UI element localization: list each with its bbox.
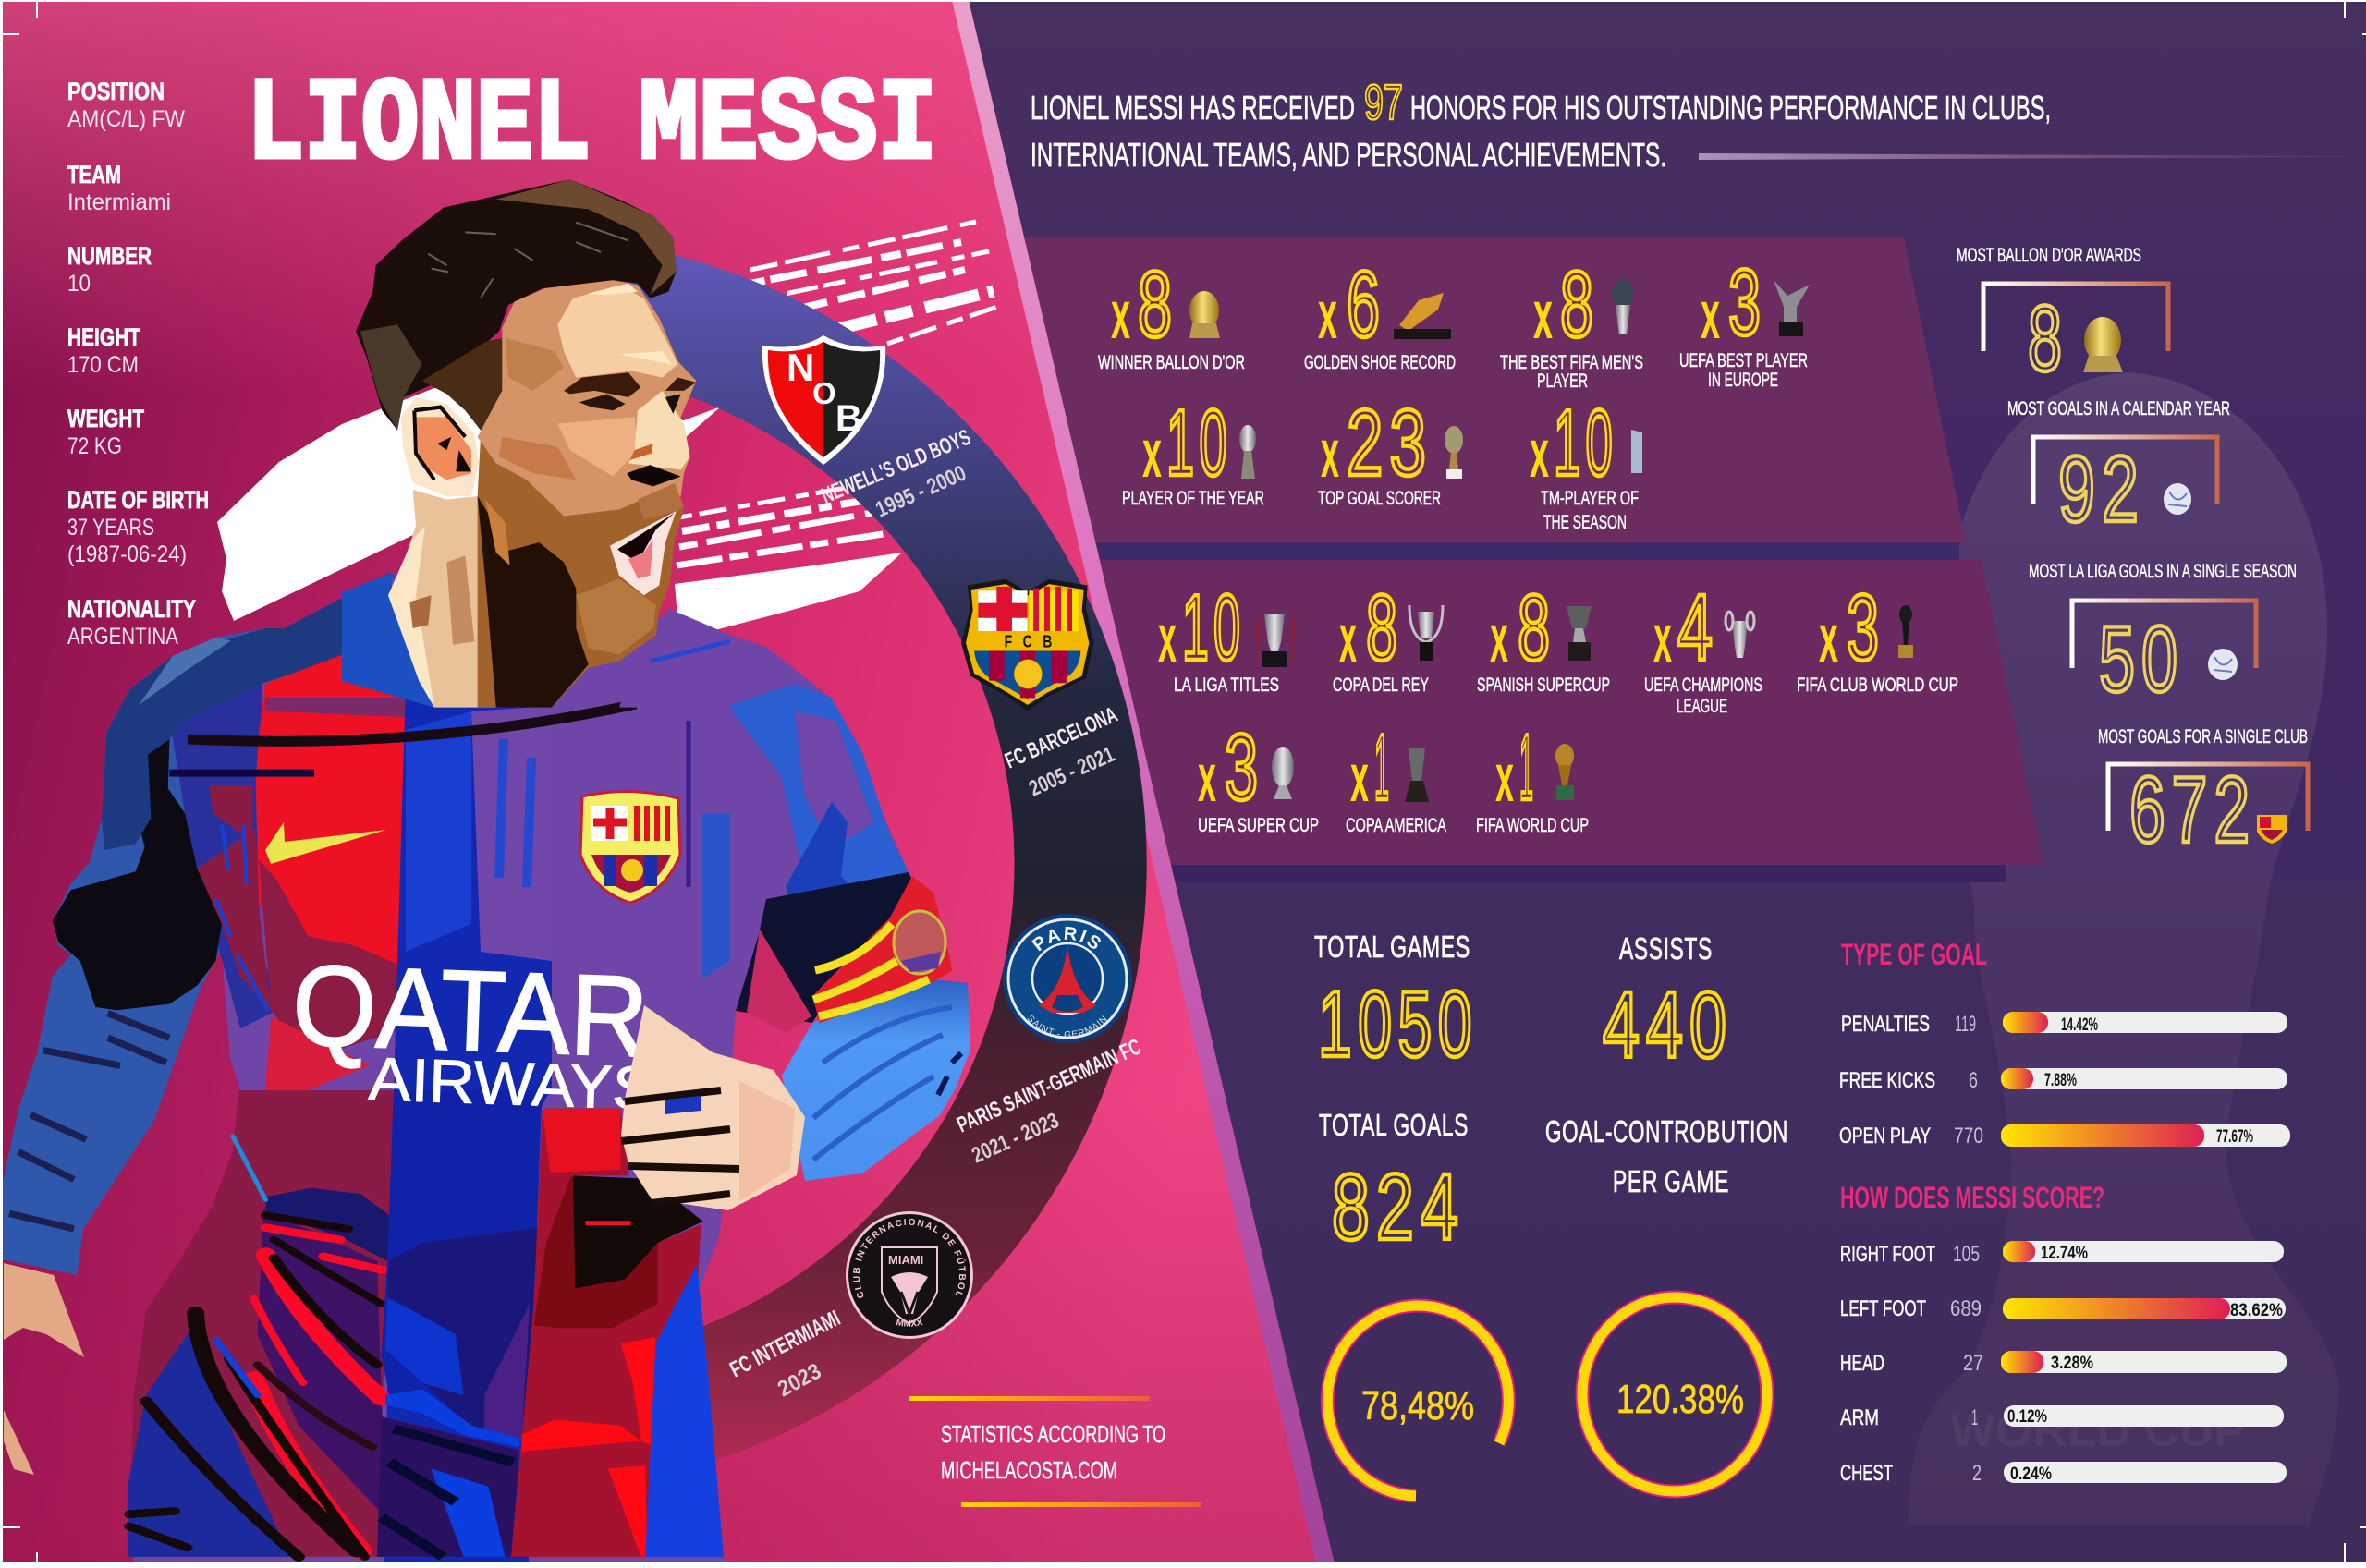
honour: TM-Player of the Season: [1530, 392, 1642, 533]
shirt left red panel: [256, 638, 413, 967]
chart: type of goal: [1839, 938, 2290, 1149]
bar: free kicks: FREE KICKS: [1839, 1068, 1935, 1093]
honour: Copa America: x: [1350, 739, 1369, 816]
record: Ballon d'Or awards: 8: [2028, 287, 2062, 391]
honour: Champions League: [1644, 577, 1762, 717]
player profile list: 37 YEARS: [67, 515, 154, 541]
honour: Copa del Rey: COPA DEL REY: [1333, 675, 1429, 696]
icon: ball: [2164, 483, 2191, 515]
stat heading: goal contribution: GOAL-CONTROBUTION: [1545, 1114, 1788, 1149]
intro sentence: 97: [1364, 75, 1403, 130]
club text: Inter Miami: [726, 1306, 845, 1402]
badge: Inter Miami: CLUB INTERNACIONAL DE FÚTBOL: [853, 1218, 966, 1298]
torso base: [130, 573, 909, 1562]
bar: penalties: 14.42%: [2061, 1015, 2098, 1035]
head and neck: [342, 179, 730, 708]
arm gap: [747, 930, 811, 1033]
honour: UEFA Best Player: UEFA BEST PLAYER: [1679, 350, 1808, 371]
intro sentence: LIONEL MESSI HAS RECEIVED: [1031, 89, 1355, 127]
bracket: [2108, 764, 2308, 831]
badge: Newell's Old Boys: B: [835, 398, 862, 439]
honour: UEFA Best Player: 3: [1728, 251, 1761, 355]
bar: open play: [1839, 1124, 2290, 1149]
honour: Copa America: [1346, 716, 1446, 836]
bar: left foot: [1840, 1296, 2286, 1321]
collar: [342, 572, 730, 708]
bar: penalties: 119: [1955, 1012, 1976, 1037]
icon: ball: [2208, 649, 2238, 680]
bar: right foot: 12.74%: [2041, 1244, 2088, 1263]
icon: UEFA trophy: [1774, 280, 1810, 336]
icon: trophy: [1239, 425, 1256, 479]
club text: PSG: [953, 1034, 1145, 1168]
badge: Newell's Old Boys: O: [812, 376, 836, 410]
honour: La Liga: 10: [1182, 577, 1245, 680]
intro sentence: [1031, 75, 2346, 174]
mouth: [610, 511, 677, 595]
source note: MICHELACOSTA.COM: [941, 1456, 1117, 1484]
badge: FC Barcelona: FCB: [1005, 631, 1052, 651]
honour: UEFA Best Player: IN EUROPE: [1708, 370, 1778, 391]
honour: The Best FIFA: PLAYER: [1537, 371, 1588, 392]
shirt center blue stripe: [384, 682, 552, 1562]
stat: assists: 440: [1603, 974, 1733, 1077]
hair: [356, 179, 677, 431]
club text: PSG: 2021 - 2023: [968, 1108, 1063, 1168]
intro sentence: HONORS FOR HIS OUTSTANDING PERFORMANCE IN CLUBS,: [1410, 89, 2051, 127]
icon: Champions League trophy: [1726, 612, 1754, 658]
honour: UEFA Super Cup: 3: [1225, 716, 1258, 820]
honour: UEFA Super Cup: [1198, 716, 1319, 836]
bar: head: 3.28%: [2051, 1354, 2093, 1373]
far sleeve: [0, 628, 388, 1275]
honour: Champions League: x: [1653, 600, 1672, 676]
panel: individual honours: [1024, 237, 1966, 542]
panel: club honours: [1091, 560, 2043, 865]
shirt left lower: [128, 1090, 394, 1557]
honour: UEFA Best Player: x: [1701, 276, 1720, 353]
shirt sponsor: nike swoosh: [265, 822, 386, 864]
player profile list: [67, 78, 209, 650]
honour: Spanish Supercup: x: [1490, 600, 1508, 676]
upper arm: [736, 872, 950, 1023]
club text: Inter Miami: FC INTERMIAMI: [726, 1306, 845, 1382]
honour: Ballon d'Or: x: [1111, 276, 1130, 353]
icon: trophy: [1445, 426, 1463, 479]
eyes and brows: [564, 372, 696, 414]
record: Ballon d'Or awards: MOST BALLON D'OR AWARDS: [1957, 245, 2141, 266]
player profile list: Intermiami: [67, 189, 171, 215]
white brush stroke: [217, 222, 1003, 639]
badge: Paris Saint-Germain: PARIS: [1031, 926, 1101, 952]
honour: FIFA World Cup: 1: [1519, 716, 1533, 820]
honour: Ballon d'Or: WINNER BALLON D'OR: [1098, 352, 1245, 373]
bracket: [2033, 437, 2217, 504]
chest seam: [188, 704, 636, 741]
honour: Copa del Rey: [1333, 577, 1443, 696]
honour: Copa America: COPA AMERICA: [1346, 815, 1446, 836]
honour: Player of the Year: 10: [1166, 392, 1232, 495]
badge: Inter Miami: [846, 1211, 973, 1339]
bar: arm: 1: [1971, 1405, 1978, 1430]
badge: Paris Saint-Germain: [1003, 914, 1132, 1043]
honour: Top Goal Scorer: [1318, 392, 1463, 509]
stat heading: goal contribution: PER GAME: [1613, 1164, 1729, 1198]
icon: Copa America trophy: [1405, 748, 1429, 802]
honour: Top Goal Scorer: TOP GOAL SCORER: [1318, 488, 1441, 509]
icon: Club World Cup trophy: [1898, 605, 1913, 658]
shirt lower right: [511, 1109, 724, 1557]
bar: penalties: [1841, 1012, 2287, 1037]
honour: The Best FIFA: THE BEST FIFA MEN'S: [1500, 352, 1643, 373]
bar: head: HEAD: [1840, 1351, 1884, 1376]
icon: Super Cup trophy: [1272, 747, 1294, 799]
honour: Golden Shoe: GOLDEN SHOE RECORD: [1304, 352, 1456, 373]
honour: FIFA World Cup: [1476, 716, 1589, 836]
chart: type of goal: TYPE OF GOAL: [1841, 938, 1987, 971]
bar: open play: 77.67%: [2216, 1127, 2253, 1147]
club text: Newell's Old Boys: NEWELL'S OLD BOYS: [818, 425, 974, 509]
stat: assists: ASSISTS: [1619, 931, 1713, 966]
honour: FIFA World Cup: FIFA WORLD CUP: [1476, 815, 1589, 836]
player profile list: AM(C/L) FW: [67, 106, 185, 132]
bar: right foot: 105: [1953, 1242, 1980, 1267]
ear: [400, 397, 479, 496]
source note: [909, 1396, 1201, 1507]
badge: Paris Saint-Germain: SAINT - GERMAIN: [1028, 1015, 1107, 1038]
honour: Spanish Supercup: 8: [1518, 577, 1550, 680]
player profile list: (1987-06-24): [67, 541, 187, 567]
icon: trophy: [1631, 430, 1642, 473]
record: goals in calendar year: 92: [2058, 438, 2145, 541]
honour: The Best FIFA: 8: [1560, 253, 1593, 357]
honour: La Liga: x: [1158, 600, 1177, 676]
bar: arm: [1840, 1405, 2284, 1430]
honour: La Liga: [1158, 577, 1294, 696]
bar: penalties: PENALTIES: [1841, 1012, 1930, 1037]
gauge: 78.48 percent: [1327, 1306, 1508, 1496]
player profile list: WEIGHT: [67, 405, 144, 432]
honour: Golden Shoe: [1304, 253, 1456, 373]
badge: Newell's Old Boys: N: [787, 346, 814, 389]
shirt right chest highlights: [689, 684, 909, 979]
badge: Inter Miami: MMXX: [896, 1319, 923, 1327]
icon: World Cup trophy: [1555, 744, 1574, 800]
club career arc: [611, 247, 1147, 1479]
player profile list: DATE OF BIRTH: [67, 486, 209, 514]
bar: free kicks: [1839, 1068, 2287, 1093]
honour: Player of the Year: x: [1142, 415, 1162, 492]
honour: TM-Player of the Season: x: [1530, 415, 1549, 492]
bar: head: [1840, 1351, 2287, 1376]
icon: The Best trophy: [1612, 279, 1634, 334]
badge: Newell's Old Boys: [762, 335, 885, 465]
record: La Liga season: 50: [2099, 608, 2184, 711]
background world cup trophy silhouette: [1908, 372, 2338, 1525]
honour: Copa del Rey: x: [1339, 600, 1357, 676]
chest upper left: [102, 573, 413, 1090]
near hand left: [4, 1263, 84, 1475]
honour: Top Goal Scorer: 23: [1347, 392, 1433, 495]
player profile list: NATIONALITY: [67, 595, 196, 623]
player profile list: ARGENTINA: [67, 624, 178, 650]
player profile list: 170 CM: [67, 352, 139, 378]
bar: arm: ARM: [1840, 1405, 1879, 1430]
honour: Champions League: 4: [1677, 577, 1713, 680]
title: [247, 60, 937, 192]
icon: Supercup trophy: [1567, 606, 1592, 661]
icon: Copa del Rey trophy: [1409, 605, 1443, 661]
beard: [478, 437, 684, 708]
icon: golden ball: [2083, 317, 2123, 372]
club text: Newell's Old Boys: [818, 425, 974, 522]
panel: left pink background: [0, 0, 1340, 1568]
record: La Liga season: [2029, 561, 2297, 711]
honour: Ballon d'Or: 8: [1138, 253, 1172, 357]
club text: FC Barcelona: [1001, 702, 1121, 801]
bracket: [2072, 601, 2256, 668]
honour: UEFA Best Player: [1679, 251, 1810, 391]
stat: total games: 1050: [1318, 973, 1478, 1076]
panel: right purple background: [969, 0, 2366, 1568]
record: goals in calendar year: [2007, 398, 2230, 541]
nose: [627, 391, 690, 486]
bar: right foot: RIGHT FOOT: [1840, 1242, 1935, 1267]
stat: total games: [1314, 930, 1478, 1076]
sideburn: [422, 334, 520, 431]
player profile list: POSITION: [67, 78, 165, 105]
neck: [388, 490, 502, 708]
bar: free kicks: 6: [1969, 1068, 1978, 1093]
stat: total goals: 824: [1332, 1156, 1465, 1259]
bar: right foot: [1840, 1241, 2284, 1267]
icon: Barcelona crest: [2257, 815, 2287, 844]
gauge: 120.38 percent: [1582, 1297, 1767, 1491]
bar: free kicks: 7.88%: [2044, 1071, 2077, 1090]
bar: chest: 2: [1972, 1461, 1982, 1486]
honour: Golden Shoe: x: [1318, 276, 1337, 353]
background world cup trophy silhouette: WORLD CUP: [1950, 1404, 2246, 1456]
player profile list: NUMBER: [67, 242, 152, 270]
bar: arm: 0.12%: [2007, 1407, 2047, 1427]
bar: left foot: 689: [1950, 1296, 1982, 1321]
bar: open play: 770: [1954, 1124, 1983, 1149]
honour: Champions League: LEAGUE: [1677, 696, 1727, 717]
player profile list: 10: [67, 271, 91, 297]
face: [478, 280, 696, 517]
club text: Newell's Old Boys: 1995 - 2000: [872, 461, 970, 522]
honour: Club World Cup: x: [1819, 600, 1838, 676]
gauge: 120.38 percent: 120.38%: [1616, 1377, 1744, 1422]
record: Ballon d'Or awards: [1957, 245, 2168, 391]
stat: total goals: TOTAL GOALS: [1319, 1108, 1469, 1142]
title: MESSI: [639, 60, 937, 192]
honour: UEFA Super Cup: x: [1198, 739, 1216, 816]
chart: how does Messi score: HOW DOES MESSI SCORE?: [1840, 1181, 2104, 1214]
shirt sponsor: Qatar Airways: QATAR: [290, 942, 651, 1081]
honour: Player of the Year: [1122, 392, 1264, 509]
badge: FC Barcelona: [961, 579, 1093, 711]
intro sentence: INTERNATIONAL TEAMS, AND PERSONAL ACHIEVEMENTS.: [1031, 136, 1666, 174]
panel band shadows: [1095, 542, 2006, 882]
bar: chest: CHEST: [1840, 1461, 1893, 1486]
honour: Spanish Supercup: [1477, 577, 1610, 696]
honour: The Best FIFA: x: [1533, 276, 1553, 353]
near hand: [621, 1005, 805, 1210]
honour: La Liga: LA LIGA TITLES: [1174, 675, 1279, 696]
player profile list: TEAM: [67, 161, 121, 188]
stat: assists: [1603, 931, 1733, 1077]
shirt sponsor: Qatar Airways: AIRWAYS: [368, 1044, 656, 1123]
lower stats background: [1174, 882, 2366, 1568]
bracket: [1983, 284, 2168, 351]
honour: FIFA World Cup: x: [1495, 739, 1514, 816]
shirt lower center: [377, 1090, 543, 1557]
player profile list: HEIGHT: [67, 323, 140, 351]
record: goals for one club: 672: [2129, 759, 2256, 862]
gauge: 78.48 percent: 78,48%: [1361, 1383, 1474, 1428]
honour: TM-Player of the Season: 10: [1554, 392, 1617, 495]
icon: golden shoe: [1394, 293, 1451, 339]
stat: total games: TOTAL GAMES: [1314, 930, 1470, 964]
bar: head: 27: [1963, 1351, 1983, 1376]
divider strip: [952, 0, 1335, 1568]
honour: Champions League: UEFA CHAMPIONS: [1644, 675, 1762, 696]
honour: Club World Cup: [1797, 577, 1958, 696]
illustration: Lionel Messi: [0, 179, 970, 1562]
icon: La Liga trophy: [1257, 614, 1294, 667]
forearm sleeve: [782, 978, 970, 1181]
honour: Ballon d'Or: [1098, 253, 1245, 373]
honour: Copa America: 1: [1374, 716, 1389, 820]
record: goals in calendar year: MOST GOALS IN A CALENDAR YEAR: [2007, 398, 2230, 419]
club text: FC Barcelona: 2005 - 2021: [1025, 742, 1118, 801]
club text: Inter Miami: 2023: [774, 1358, 825, 1402]
title: LIONEL: [247, 60, 591, 192]
honour: Player of the Year: PLAYER OF THE YEAR: [1122, 488, 1264, 509]
honour: Club World Cup: 3: [1847, 577, 1879, 680]
stat heading: goal contribution: [1545, 1114, 1788, 1198]
honour: Club World Cup: FIFA CLUB WORLD CUP: [1797, 675, 1958, 696]
source note: STATISTICS ACCORDING TO: [941, 1420, 1165, 1448]
bar: left foot: 83.62%: [2230, 1301, 2283, 1320]
honour: TM-Player of the Season: THE SEASON: [1543, 512, 1627, 533]
shirt badge: FC Barcelona: [580, 791, 680, 903]
icon: golden ball: [1189, 291, 1220, 338]
armpit shadow: [148, 739, 222, 986]
honour: Golden Shoe: 6: [1347, 253, 1380, 357]
record: goals for one club: [2098, 726, 2308, 862]
bar: chest: 0.24%: [2010, 1465, 2052, 1484]
honour: TM-Player of the Season: TM-PLAYER OF: [1541, 488, 1639, 509]
club text: FC Barcelona: FC BARCELONA: [1001, 702, 1121, 773]
badge: Inter Miami: MIAMI: [888, 1253, 923, 1267]
honour: Copa del Rey: 8: [1366, 577, 1397, 680]
armband: [812, 876, 952, 1023]
stat: total goals: [1319, 1108, 1469, 1259]
honour: The Best FIFA: [1500, 253, 1643, 392]
honour: Spanish Supercup: SPANISH SUPERCUP: [1477, 675, 1610, 696]
chart: how does Messi score: [1840, 1181, 2287, 1486]
bar: open play: OPEN PLAY: [1839, 1124, 1931, 1149]
moustache: [638, 483, 684, 519]
honour: UEFA Super Cup: UEFA SUPER CUP: [1198, 815, 1319, 836]
bar: chest: [1840, 1461, 2287, 1486]
honour: Top Goal Scorer: x: [1321, 415, 1339, 492]
club text: PSG: PARIS SAINT-GERMAIN FC: [953, 1034, 1145, 1137]
bar: left foot: LEFT FOOT: [1840, 1296, 1926, 1321]
player profile list: 72 KG: [67, 433, 122, 459]
